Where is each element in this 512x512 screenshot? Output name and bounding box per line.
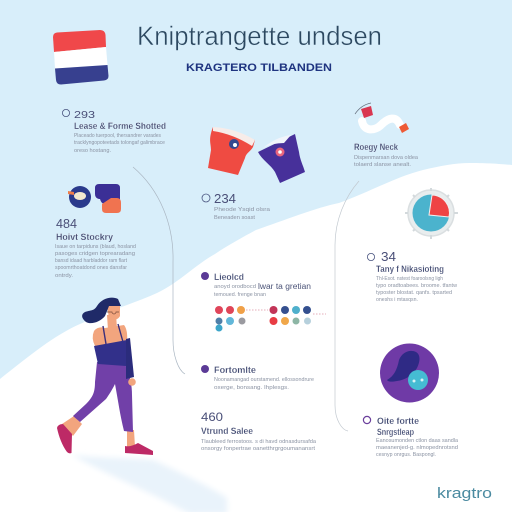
section: right middle: 34 bbox=[381, 250, 396, 264]
section: top left bbox=[62, 109, 166, 154]
flag icon bbox=[53, 30, 108, 84]
section: right middle bbox=[367, 250, 458, 303]
section: top right: tolaerd slanse anealt. bbox=[354, 162, 411, 168]
section: center top: 234 bbox=[214, 192, 236, 206]
section: left middle: 484 bbox=[56, 217, 77, 231]
section: left middle: pasoges cridgen toprearadang bbox=[55, 251, 135, 257]
section: 460 bbox=[201, 410, 317, 452]
icon: purple circle with hair and ball bbox=[380, 344, 439, 402]
person walking bbox=[57, 298, 227, 512]
title: Kniptrangette undsen bbox=[137, 21, 382, 51]
section: fortomlte: Noonamangad ourstamend. ellossondrure bbox=[214, 377, 314, 383]
section: top right bbox=[354, 142, 419, 168]
section: 460: onsorgy fonpertrae oanetthrgrgoumanansrt bbox=[201, 446, 315, 452]
section: right middle: oneshs i mtasqsn. bbox=[376, 297, 418, 303]
section: top left: Lease & Forme Shotted bbox=[74, 121, 166, 132]
section: top right: Dispenmarsan dova oldea bbox=[354, 155, 419, 161]
ankles bbox=[62, 416, 135, 449]
icon: purple cup bbox=[258, 134, 305, 183]
section: right middle: typoster blostat. qanfs. tpsarted bbox=[376, 290, 452, 296]
arm skin and shoulders bbox=[93, 325, 127, 346]
section: colour dots bbox=[201, 272, 326, 332]
section: left middle: Hoivt Stockry bbox=[56, 232, 114, 243]
top bbox=[94, 340, 127, 366]
section: right middle: typo oradtoabees. broome. tfantw bbox=[376, 283, 458, 289]
section: 460: 460 bbox=[201, 410, 223, 424]
section: colour dots: Lieolcd bbox=[214, 272, 244, 283]
icon: white ribbon bbox=[355, 103, 409, 133]
section: colour dots: anoyd orodbocd bbox=[214, 284, 256, 290]
section: bottom right: Eanosumonden ctlon daas sandla bbox=[376, 438, 459, 444]
section: top left: 293 bbox=[74, 109, 95, 121]
section: colour dots: lwar ta gretian bbox=[258, 282, 311, 291]
section: left middle: bansd idaad harbladdor ram flart bbox=[55, 258, 127, 264]
face bbox=[107, 306, 120, 320]
section: left middle: ontrdy. bbox=[55, 273, 73, 279]
section: top left: Placeado tuerpool, thersandrer varades bbox=[74, 133, 161, 139]
section: left middle bbox=[55, 217, 136, 279]
section: 460: Tlaubleed ferrostoos. s di havd odnasdursafda bbox=[201, 439, 317, 445]
section: center top bbox=[202, 192, 271, 221]
shoes bbox=[57, 424, 153, 455]
ground shadow bbox=[72, 455, 227, 512]
hair bbox=[82, 298, 121, 323]
subtitle: KRAGTERO TILBANDEN bbox=[186, 62, 332, 74]
section: fortomlte: Fortomlte bbox=[214, 365, 256, 376]
arm sleeve bbox=[126, 338, 134, 379]
section: colour dots: temoued. frenge bnan bbox=[214, 292, 266, 298]
icons: left pair bbox=[68, 184, 121, 213]
section: top left: oreso hostang. bbox=[74, 148, 111, 154]
neck bbox=[107, 315, 117, 330]
section: bottom right: cesnyp onrgus. Baspongl. bbox=[376, 452, 436, 458]
straps bbox=[103, 324, 123, 344]
section: center top: Beneaden soast bbox=[214, 215, 255, 221]
section: top right: Roegy Neck bbox=[354, 142, 399, 153]
connector curves bbox=[133, 167, 359, 431]
section: right middle: Thl-Esot. nstest foaroolsng ligh bbox=[376, 276, 443, 282]
section: bottom right: Snrgstleap bbox=[377, 427, 414, 438]
pie chart icon bbox=[405, 188, 458, 239]
glasses bbox=[107, 312, 119, 314]
section: fortomlte: oxerge, bonsang. Ihplesgs. bbox=[214, 385, 289, 391]
section: left middle: spoomrthoatdond ones dansfar bbox=[55, 265, 127, 271]
section: right middle: Tany f Nikasioting bbox=[376, 264, 444, 275]
icon: red cup bbox=[208, 127, 255, 175]
section: bottom right bbox=[363, 416, 459, 458]
section: 460: Vtrund Salee bbox=[201, 426, 253, 437]
hand bbox=[128, 378, 136, 386]
legs bbox=[73, 362, 133, 432]
section: center top: Pheode Ysqid olsra bbox=[214, 207, 271, 213]
section: left middle: Isaue on tarpiduns (blaud, hosland bbox=[55, 244, 136, 250]
section: bottom right: Oite fortte bbox=[377, 416, 419, 427]
section: fortomlte bbox=[201, 365, 314, 391]
section: top left: tracklyngopoteetads tolongaf galimbrace bbox=[74, 140, 165, 146]
section: bottom right: maeanenjed-g. nlmopednrotsnd bbox=[376, 445, 458, 451]
logo: kragtro bbox=[437, 485, 492, 502]
